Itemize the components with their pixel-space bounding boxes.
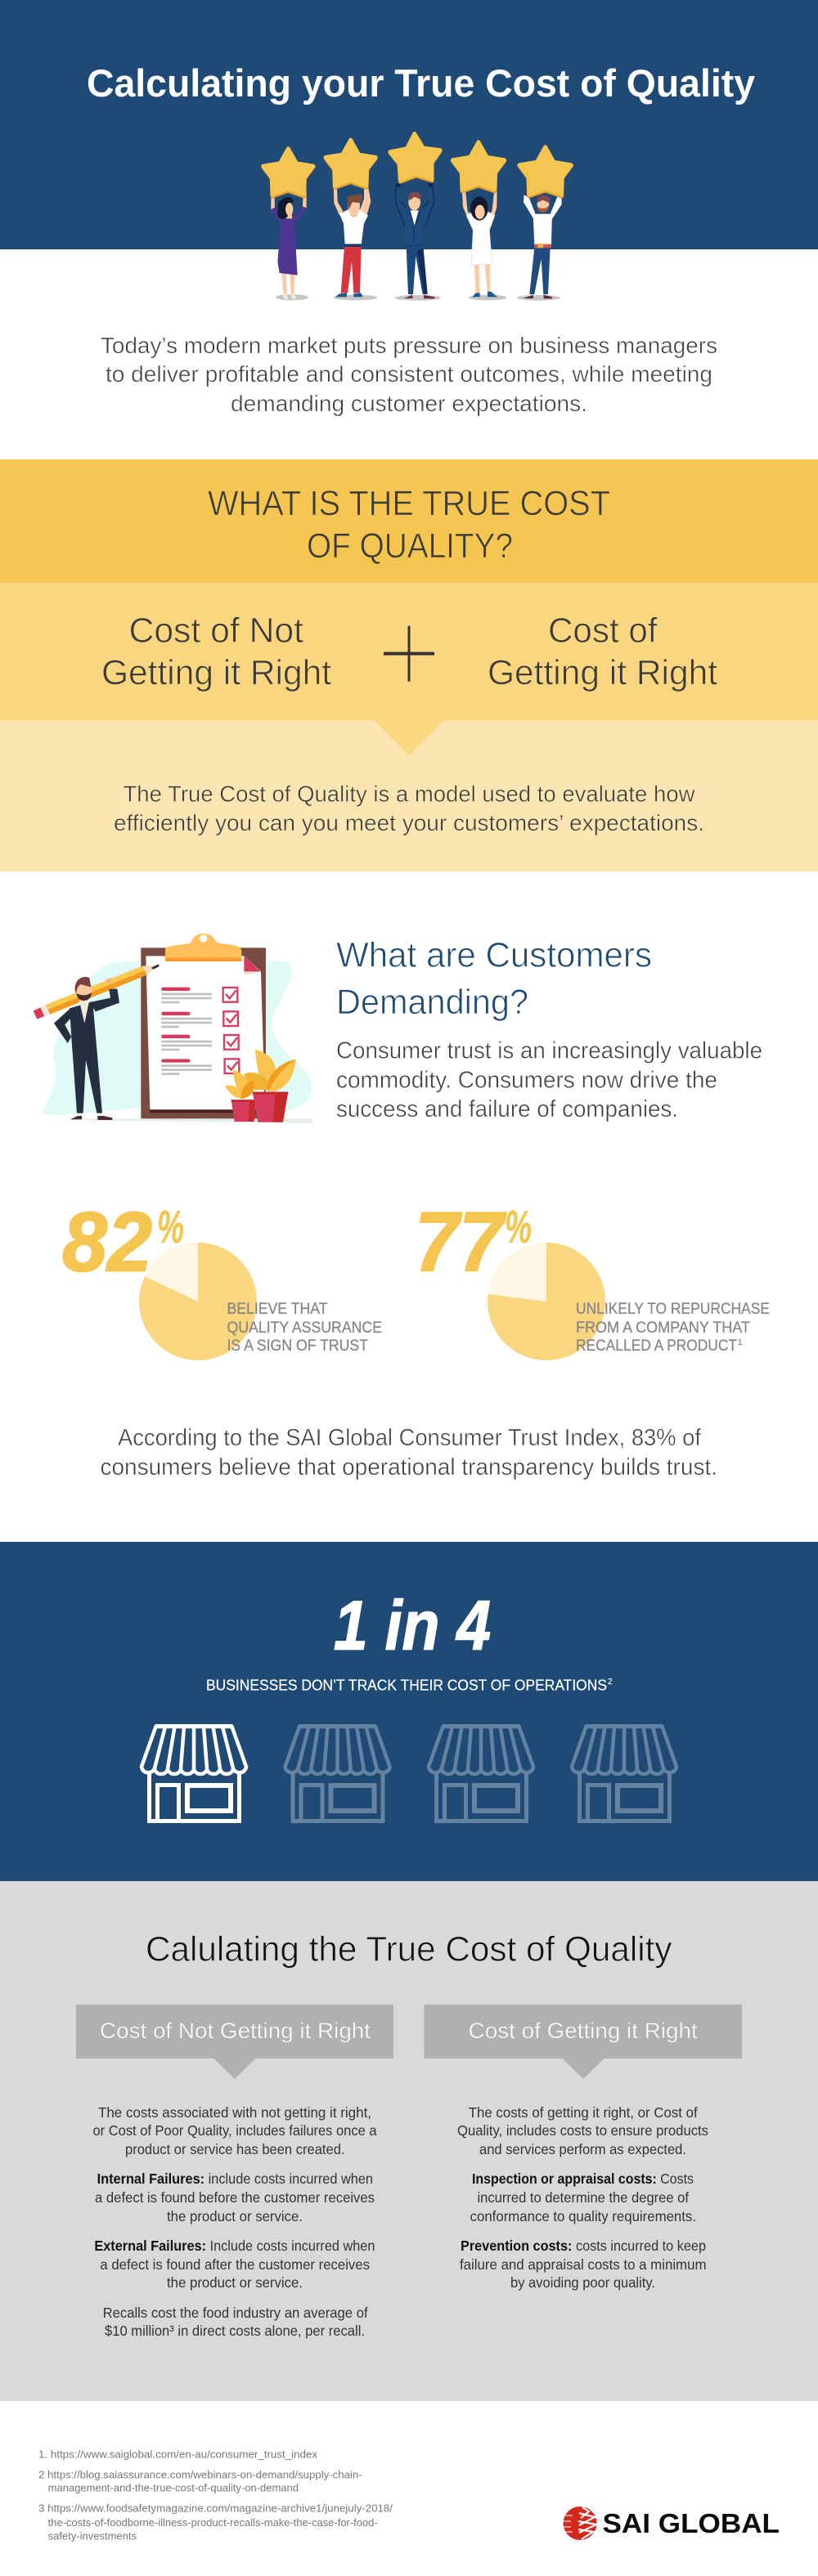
label: RECALLED A PRODUCT: [576, 1337, 737, 1355]
label: cost of getting it right: Cost of: [548, 612, 658, 651]
number: %: [505, 1201, 532, 1253]
caption: 2: [608, 1678, 613, 1687]
icon: shop faded 3: [572, 1724, 676, 1823]
number: 82: [62, 1195, 152, 1288]
label: [227, 1301, 382, 1355]
text: left column: a defect is found before the customer receives: [95, 2189, 375, 2206]
text: left column: The costs associated with not getting it right,: [98, 2104, 371, 2121]
text: consumer trust: commodity. Consumers now drive the: [336, 1068, 717, 1094]
callout: cost of getting it right: Cost of Getting it Right: [469, 2018, 698, 2043]
arrow: pointer down: [374, 720, 444, 755]
person: woman in purple dress: [271, 190, 308, 300]
callout: cost of not getting it right: [76, 2005, 393, 2079]
label: cost of not getting it right: Getting it Right: [101, 654, 331, 692]
text: definition: [114, 782, 704, 836]
illustration: man with pencil and checklist: [34, 934, 312, 1123]
text: introduction: Today’s modern market puts pressure on business managers: [101, 333, 717, 358]
icon: star 5: [519, 147, 571, 196]
text: right column: The costs of getting it right, or Cost of: [469, 2104, 698, 2121]
text: according to the index: [100, 1425, 717, 1481]
text: left column: the product or service.: [167, 2274, 303, 2291]
label: FROM A COMPANY THAT: [576, 1319, 750, 1337]
text: left column: a defect is found after the customer receives: [100, 2256, 370, 2273]
icon: red globe: [563, 2507, 597, 2540]
checklist: [161, 988, 239, 1075]
text: consumer trust: success and failure of companies.: [336, 1096, 678, 1122]
pie chart: 82 percent: [139, 1243, 257, 1360]
label: cost of getting it right: [488, 612, 717, 692]
number: %: [157, 1201, 184, 1253]
clipboard: [141, 934, 266, 1118]
text: left column: External Failures: Include costs incurred when: [94, 2238, 375, 2254]
label: cost of not getting it right: Cost of Not: [129, 612, 303, 651]
text: introduction: [101, 333, 717, 416]
text: according to the index: According to the SAI Global Consumer Trust Index, 83% of: [118, 1425, 701, 1451]
stat: 82 percent: [62, 1195, 382, 1360]
heading: what are customers demanding: What are Customers: [336, 935, 652, 974]
statistic: 1 in 4: 1 in 4: [334, 1588, 491, 1664]
text: according to the index: consumers believe that operational transparency builds trust.: [100, 1454, 717, 1481]
text: right column: Inspection or appraisal costs: Costs: [472, 2171, 694, 2187]
person: man with beard and white shirt: [517, 195, 562, 301]
panel: header: [0, 0, 818, 249]
icon: star 1: [263, 149, 313, 196]
footnotes: 1. https://www.saiglobal.com/en-au/consumer_trust_index: [38, 2449, 318, 2461]
footnotes: 2 https://blog.saiassurance.com/webinars-on-demand/supply-chain-: [38, 2469, 362, 2480]
title: Calculating your True Cost of Quality: [87, 61, 755, 105]
icon: shop faded 2: [429, 1724, 533, 1823]
text: right column: and services perform as expected.: [479, 2141, 686, 2157]
label: BELIEVE THAT: [227, 1301, 328, 1318]
plants in pots: [225, 1050, 296, 1122]
label: UNLIKELY TO REPURCHASE: [576, 1301, 770, 1318]
label: cost of not getting it right: [101, 612, 331, 692]
label: [576, 1301, 770, 1355]
text: right column: conformance to quality requirements.: [470, 2208, 696, 2224]
text: left column: Recalls cost the food industry an average of: [103, 2305, 368, 2321]
text: consumer trust: Consumer trust is an increasingly valuable: [336, 1038, 762, 1064]
label: QUALITY ASSURANCE: [227, 1319, 382, 1337]
text: right column: [457, 2104, 708, 2291]
label: 1: [738, 1338, 743, 1347]
man in suit: [54, 977, 119, 1120]
text: definition: The True Cost of Quality is a model used to evaluate how: [123, 782, 695, 806]
icon: star 3: [389, 132, 441, 182]
footnotes: 3 https://www.foodsafetymagazine.com/magazine-archive1/junejuly-2018/: [38, 2503, 393, 2515]
heading: Calulating the True Cost of Quality: [146, 1931, 672, 1969]
panel: 1 in 4 businesses: [0, 1542, 818, 1881]
panel: calculating the true cost of quality: [0, 1881, 818, 2401]
footnotes: management-and-the-true-cost-of-quality-on-demand: [48, 2482, 299, 2493]
text: left column: product or service has been created.: [125, 2141, 345, 2157]
icon: plus sign: [384, 626, 434, 682]
text: introduction: demanding customer expectations.: [231, 391, 587, 416]
text: left column: $10 million³ in direct costs alone, per recall.: [105, 2323, 365, 2339]
label: IS A SIGN OF TRUST: [227, 1337, 368, 1355]
callout: cost of not getting it right: Cost of Not Getting it Right: [100, 2018, 371, 2043]
caption: BUSINESSES DON’T TRACK THEIR COST OF OPERATIONS: [206, 1678, 607, 1694]
logo: SAI Global: [563, 2507, 780, 2540]
text: definition: efficiently you can you meet your customers’ expectations.: [114, 810, 704, 836]
pie chart: 77 percent: [488, 1243, 605, 1360]
heading: what are customers demanding: Demanding?: [336, 983, 528, 1022]
stat: 77 percent: [415, 1195, 770, 1360]
illustration: five people holding stars: [263, 132, 571, 301]
text: right column: Quality, includes costs to ensure products: [457, 2122, 708, 2139]
heading: what are customers demanding: [336, 935, 652, 1022]
heading: what is the true cost: OF QUALITY?: [307, 527, 513, 566]
icon: shop faded 1: [285, 1724, 389, 1823]
text: left column: or Cost of Poor Quality, includes failures once a: [93, 2122, 377, 2139]
text: consumer trust: [336, 1038, 762, 1122]
text: introduction: to deliver profitable and consistent outcomes, while meeting: [106, 361, 712, 387]
text: left column: [93, 2104, 377, 2339]
text: right column: by avoiding poor quality.: [510, 2274, 655, 2291]
footnotes: the-costs-of-foodborne-illness-product-recalls-make-the-case-for-food-: [48, 2517, 378, 2529]
panel: what is the true cost of quality: [0, 459, 818, 871]
icon: star 4: [452, 142, 505, 191]
heading: what is the true cost: [208, 485, 610, 566]
callout: cost of getting it right: [424, 2005, 742, 2079]
pencil: [34, 964, 160, 1019]
person: woman in white dress: [462, 192, 506, 300]
person: man in red trousers: [334, 181, 377, 300]
icon: shop highlighted: [142, 1724, 246, 1823]
label: cost of getting it right: Getting it Right: [488, 654, 717, 692]
wordmark: SAI GLOBAL: [602, 2508, 780, 2538]
text: right column: incurred to determine the degree of: [478, 2189, 689, 2206]
footnotes: safety-investments: [48, 2531, 137, 2542]
number: 77: [415, 1195, 506, 1288]
person: man in navy suit: [395, 183, 441, 301]
icon: star 2: [326, 140, 375, 187]
footnotes: [38, 2449, 393, 2542]
text: right column: failure and appraisal costs to a minimum: [460, 2256, 707, 2273]
text: left column: the product or service.: [167, 2208, 303, 2224]
text: left column: Internal Failures: include costs incurred when: [97, 2171, 373, 2187]
text: right column: Prevention costs: costs incurred to keep: [461, 2238, 706, 2254]
heading: what is the true cost: WHAT IS THE TRUE COST: [208, 485, 610, 523]
